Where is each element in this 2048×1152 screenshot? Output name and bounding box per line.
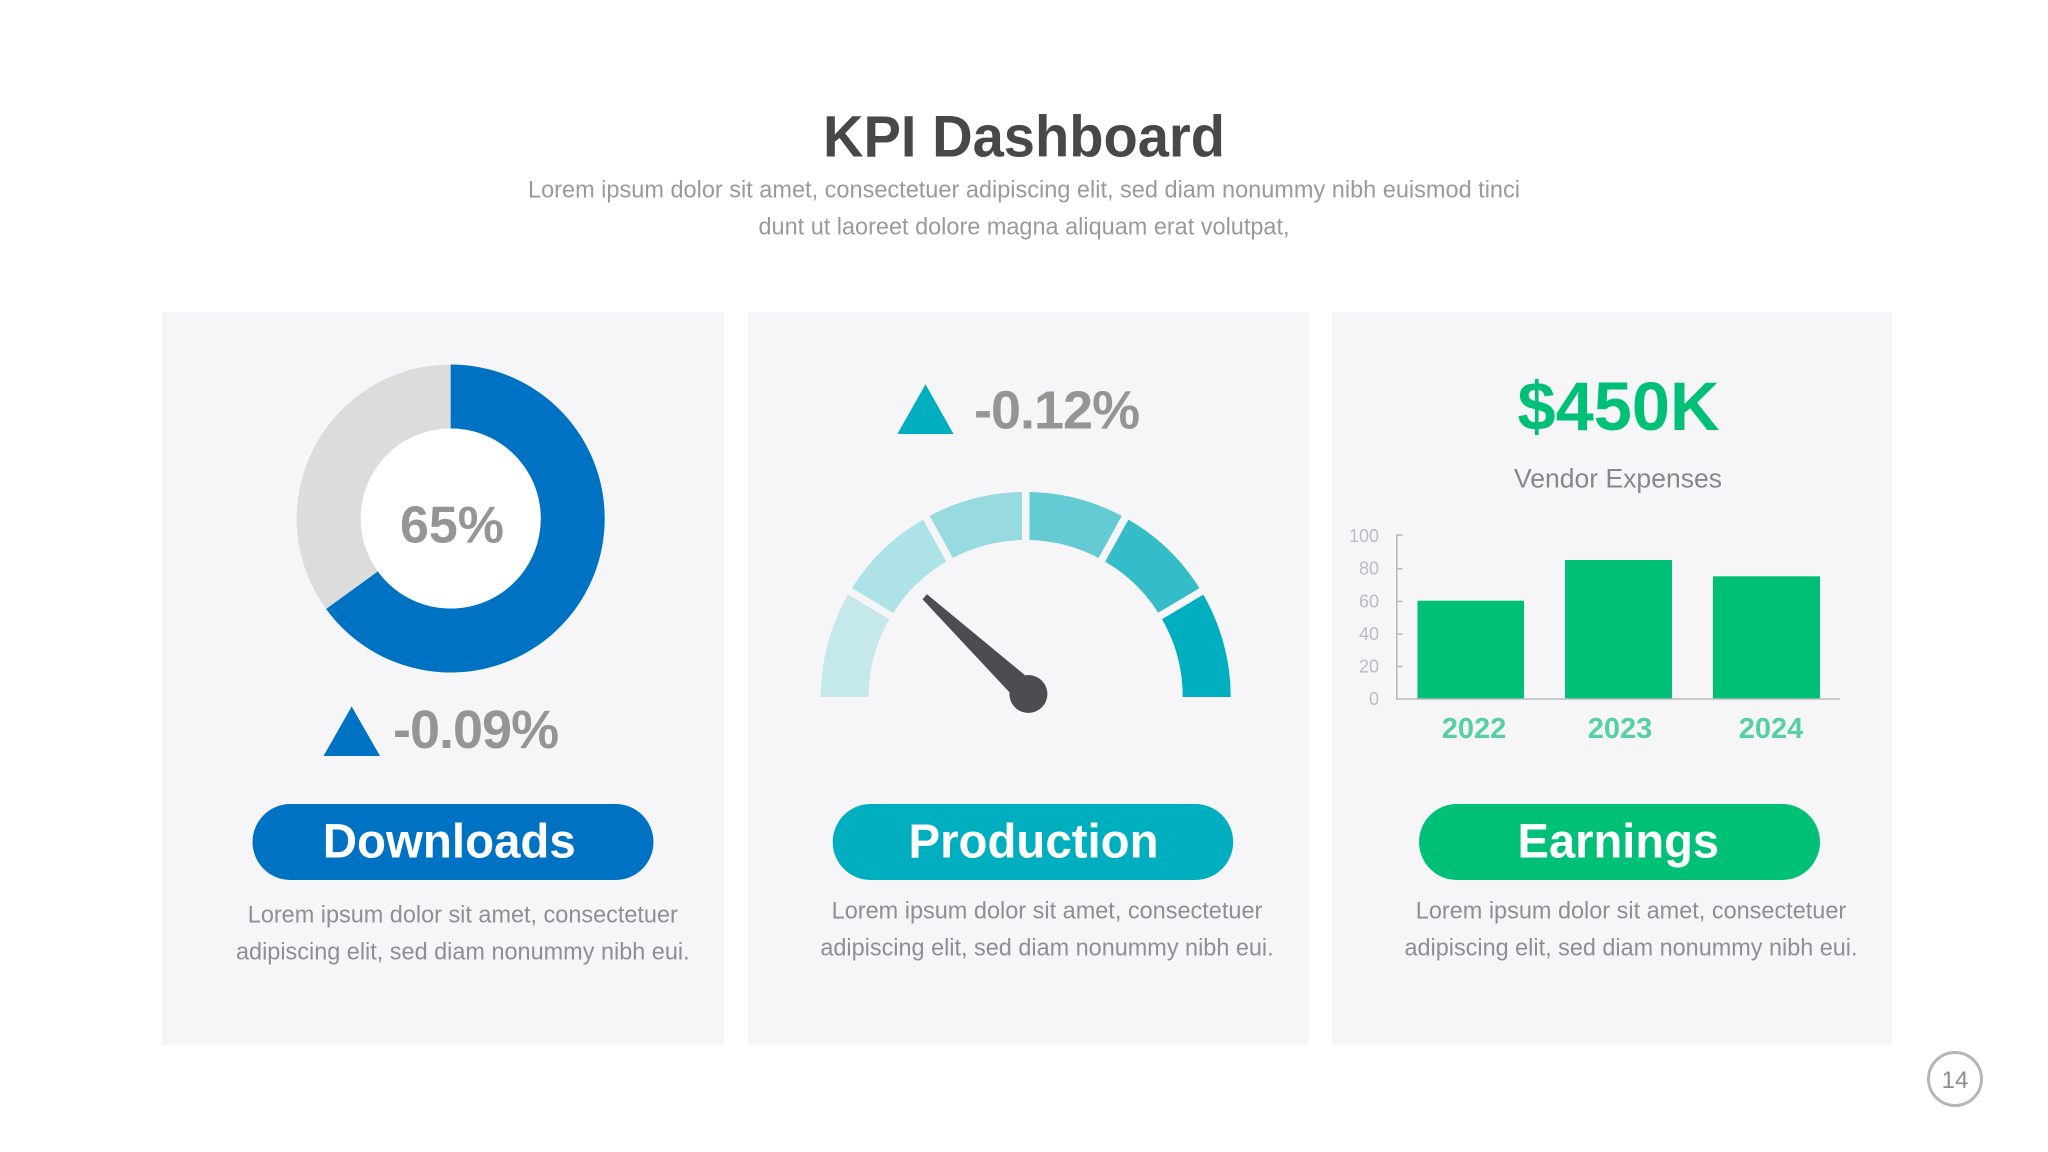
downloads pill [252, 804, 654, 880]
panel: earnings [1332, 312, 1892, 1045]
bar chart: 60 [1359, 592, 1379, 612]
panel: production [748, 312, 1309, 1045]
production pill: Production [908, 815, 1158, 868]
bar chart: 40 [1359, 624, 1379, 644]
downloads delta value: -0.09% [393, 700, 558, 760]
bar chart: 0 [1369, 689, 1379, 709]
donut chart: 65% [297, 364, 605, 672]
production description: adipiscing elit, sed diam nonummy nibh eui. [820, 934, 1274, 961]
bar chart: 2023 [1588, 713, 1652, 745]
downloads pill: Downloads [323, 815, 576, 868]
earnings description [1404, 898, 1858, 961]
bar chart: 100 [1349, 526, 1379, 546]
production description: Lorem ipsum dolor sit amet, consectetuer [832, 898, 1262, 925]
bar chart: 80 [1359, 558, 1379, 578]
production pill [833, 804, 1233, 880]
page number [1928, 1052, 1982, 1106]
earnings description: adipiscing elit, sed diam nonummy nibh eui. [1404, 934, 1858, 961]
earnings pill: Earnings [1518, 815, 1719, 868]
subtitle text block: Lorem ipsum dolor sit amet, consectetuer adipiscing elit, sed diam nonummy nibh euismod tinci [528, 176, 1520, 204]
downloads description: Lorem ipsum dolor sit amet, consectetuer [248, 902, 678, 929]
earnings amount: $450K [1518, 368, 1720, 445]
production description [820, 898, 1274, 961]
subtitle text block: dunt ut laoreet dolore magna aliquam erat volutpat, [758, 214, 1290, 240]
downloads description [236, 902, 690, 965]
bar chart: 2024 [1739, 713, 1803, 745]
earnings chart caption: Vendor Expenses [1514, 464, 1722, 494]
icon: teal triangle [897, 384, 954, 434]
panel: downloads [162, 312, 724, 1045]
earnings description: Lorem ipsum dolor sit amet, consectetuer [1416, 898, 1846, 925]
page number: 14 [1942, 1067, 1968, 1094]
bar chart: 20 [1359, 656, 1379, 676]
title: KPI Dashboard [823, 104, 1225, 170]
bar chart: 2022 [1442, 713, 1506, 745]
gauge chart [821, 486, 1231, 697]
production delta value: -0.12% [974, 380, 1139, 440]
subtitle text block [528, 176, 1520, 240]
bar chart [1349, 526, 1840, 745]
gauge needle [922, 594, 1047, 713]
icon: blue triangle [324, 706, 380, 756]
downloads description: adipiscing elit, sed diam nonummy nibh eui. [236, 938, 690, 965]
donut value: 65% [400, 496, 504, 554]
earnings pill [1419, 804, 1820, 880]
